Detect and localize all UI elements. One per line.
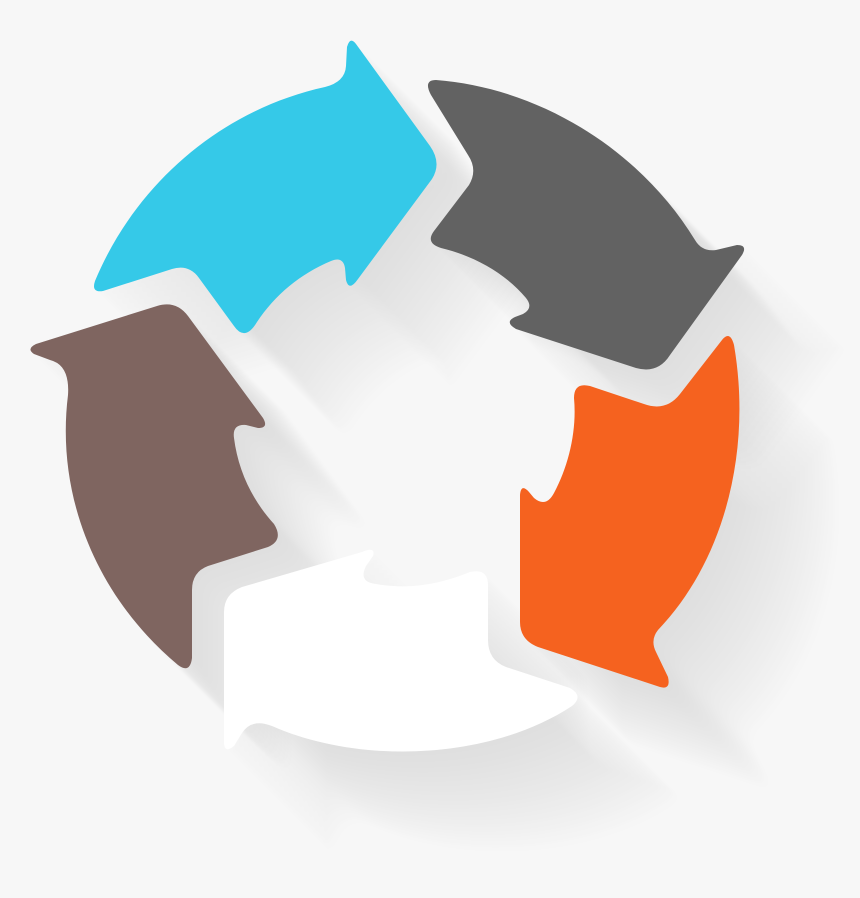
arrow: orange	[520, 336, 739, 688]
long shadow: orange arrow	[525, 341, 839, 788]
long shadow: blue arrow	[99, 46, 537, 433]
long shadow: gray arrow	[433, 85, 844, 469]
arrow: dark gray	[428, 80, 744, 369]
arrow: brown	[30, 304, 278, 668]
long shadow: white arrow	[229, 555, 678, 852]
long shadow: brown arrow	[35, 309, 378, 768]
arrow: blue	[94, 41, 437, 333]
arrow: white	[224, 550, 578, 752]
